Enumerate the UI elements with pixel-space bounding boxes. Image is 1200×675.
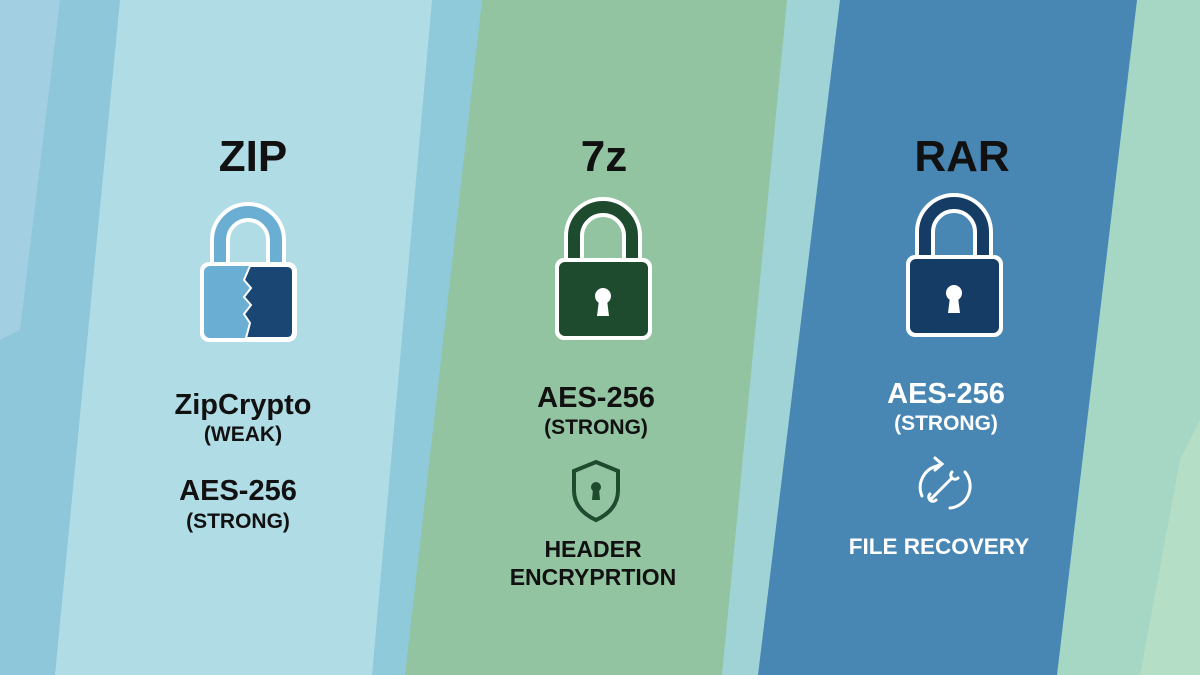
text: ZIP encryption: ZipCrypto (175, 389, 311, 421)
text: ZIP encryption: AES-256 (179, 475, 297, 507)
text: ZIP encryption: (WEAK) (204, 423, 282, 446)
text: file recovery: FILE RECOVERY (849, 534, 1029, 559)
text: ZIP encryption: (STRONG) (186, 510, 290, 533)
text: 7z encryption: AES-256 (537, 382, 655, 414)
text: header encryption: ENCRYPRTION (510, 564, 676, 590)
text: header encryption: HEADER (544, 536, 642, 562)
icon: RAR lock (906, 203, 1003, 337)
text: RAR encryption: (STRONG) (894, 412, 998, 435)
panel: RAR band (758, 0, 1137, 675)
text: header encryption (510, 536, 676, 590)
text: RAR encryption: AES-256 (887, 378, 1005, 410)
title: ZIP: ZIP (219, 132, 287, 181)
icon: recovery (920, 458, 970, 508)
text: 7z encryption (537, 382, 655, 439)
title: RAR: RAR (914, 132, 1010, 181)
text: ZIP encryption (175, 389, 311, 533)
icon: shield (574, 462, 618, 520)
panel: 7z band (405, 0, 787, 675)
text: RAR encryption (887, 378, 1005, 435)
icon: broken lock (200, 212, 297, 342)
text: 7z encryption: (STRONG) (544, 416, 648, 439)
title: 7z: 7z (581, 132, 627, 181)
panel: ZIP band (55, 0, 432, 675)
icon: 7z lock (555, 207, 652, 340)
